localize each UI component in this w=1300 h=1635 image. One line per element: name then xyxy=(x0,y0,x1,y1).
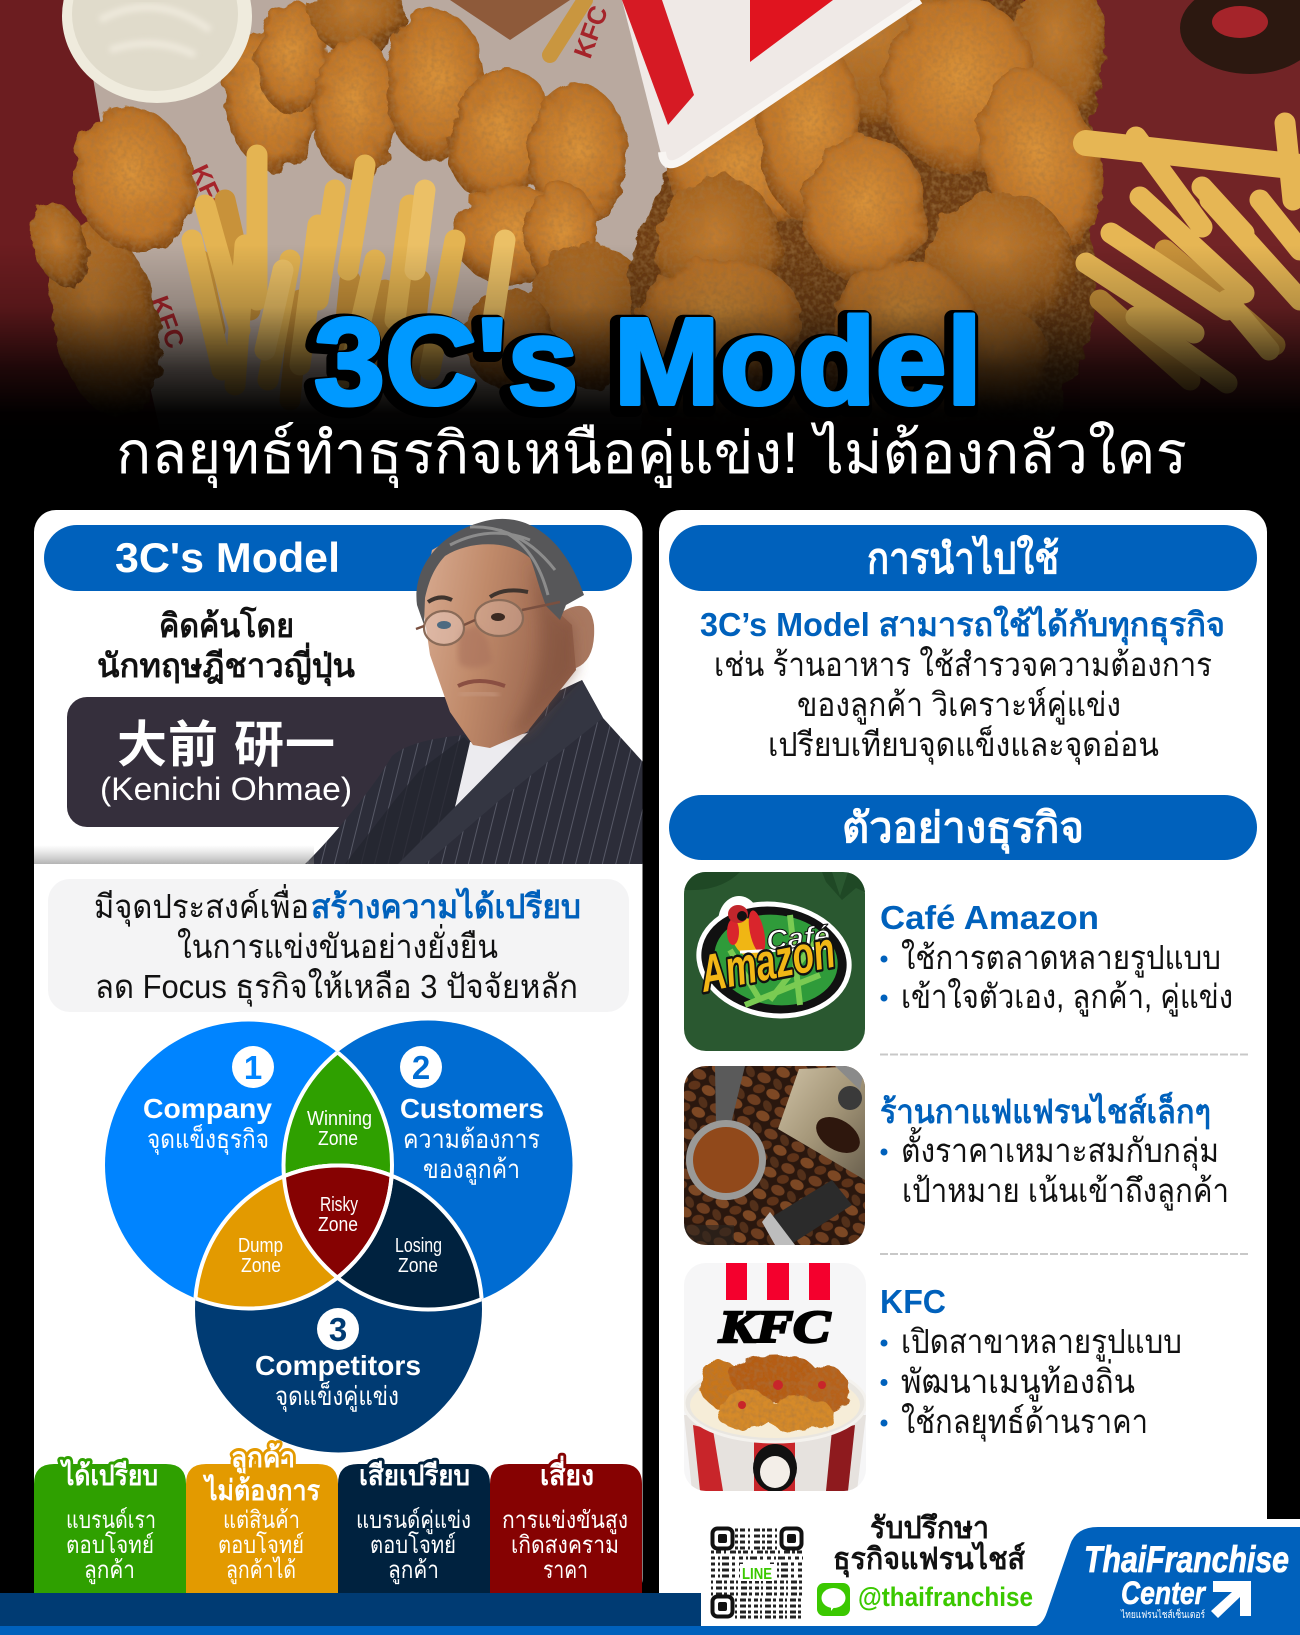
hero food photo xyxy=(0,0,1300,450)
zone: Dump xyxy=(194,1164,390,1306)
application text: เช่น ร้านอาหาร ใช้สำรวจความต้องการ xyxy=(714,646,1212,683)
hero food photo: KFC xyxy=(567,1,614,62)
card: disadvantage: แบรนด์คู่แข่ง xyxy=(356,1506,471,1535)
name box xyxy=(67,697,467,827)
chicken pile xyxy=(630,0,1124,420)
card: risky: การแข่งขันสูง xyxy=(502,1507,628,1535)
card: advantage: แบรนด์เรา xyxy=(66,1506,156,1534)
circle: Customers xyxy=(284,1020,572,1310)
zone: Winning xyxy=(282,1051,390,1176)
card: disadvantage xyxy=(338,1460,490,1594)
label: Customers: Customers xyxy=(400,1093,544,1124)
label: Customers: ของลูกค้า xyxy=(423,1154,520,1185)
badge 2: 2 xyxy=(412,1049,430,1086)
label: Winning Zone: Zone xyxy=(318,1128,358,1150)
logo: ThaiFranchise Center: ไทยแฟรนไชส์เซ็นเตอร์ xyxy=(1120,1607,1206,1621)
card: disadvantage: ตอบโจทย์ xyxy=(370,1531,456,1559)
panel: left top xyxy=(34,510,643,1600)
card: customers do not want: ตอบโจทย์ xyxy=(218,1531,304,1559)
badge 3: 3 xyxy=(329,1311,347,1348)
card: disadvantage: เสียเปรียบ xyxy=(359,1460,470,1491)
title: 3C's Model: 3C's Model xyxy=(314,294,982,431)
purpose box: มีจุดประสงค์เพื่อ xyxy=(94,884,309,927)
name box: (Kenichi Ohmae) xyxy=(100,771,352,807)
inventor caption: นักทฤษฎีชาวญี่ปุ่น xyxy=(97,642,355,687)
icon: LINE xyxy=(817,1583,850,1616)
label: Risky Zone: Zone xyxy=(318,1214,358,1236)
label: Company: จุดแข็งธุรกิจ xyxy=(147,1123,269,1155)
zone: Losing xyxy=(286,1164,484,1308)
zone: Risky xyxy=(286,1164,390,1275)
label: Winning Zone: Winning xyxy=(307,1108,372,1130)
label: Customers: ความต้องการ xyxy=(403,1124,540,1154)
card: customers do not want: ลูกค้า xyxy=(231,1442,295,1475)
card: disadvantage: ลูกค้า xyxy=(388,1557,439,1585)
sauce cup xyxy=(62,0,252,103)
pill: application heading: การนำไปใช้ xyxy=(867,534,1059,582)
LINE handle: @thaifranchise xyxy=(858,1582,1033,1612)
footer bar xyxy=(0,1593,1300,1635)
badge 2 xyxy=(400,1046,442,1088)
card: risky xyxy=(490,1455,642,1594)
text: franchise coffee shop: ร้านกาแฟแฟรนไชส์เล็กๆ xyxy=(880,1091,1211,1130)
text: KFC: พัฒนาเมนูท้องถิ่น xyxy=(901,1359,1135,1402)
text: Cafe Amazon xyxy=(880,899,1233,1017)
badge 1 xyxy=(232,1046,274,1088)
text: Cafe Amazon: เข้าใจตัวเอง, ลูกค้า, คู่แข่ง xyxy=(901,978,1233,1017)
application text: 3C’s Model สามารถใช้ได้กับทุกธุรกิจ xyxy=(700,605,1225,646)
image: KFC logo and rice bucket xyxy=(684,1263,866,1492)
circle: Competitors xyxy=(195,1166,482,1452)
purpose box: สร้างความได้เปรียบ xyxy=(311,887,581,925)
text: KFC: เปิดสาขาหลายรูปแบบ xyxy=(901,1323,1182,1362)
card: customers do not want: ไม่ต้องการ xyxy=(202,1474,320,1506)
pill: 3C's Model heading: 3C's Model xyxy=(115,534,340,581)
image: Cafe Amazon logo: Café xyxy=(765,920,831,956)
shadow above inner panel xyxy=(34,845,314,864)
QR code xyxy=(711,1528,803,1617)
text: Cafe Amazon: ใช้การตลาดหลายรูปแบบ xyxy=(901,939,1221,978)
logo: ThaiFranchise Center: Center xyxy=(1121,1575,1206,1611)
fries left xyxy=(192,155,505,400)
image: Cafe Amazon logo: Amazon xyxy=(694,921,840,1004)
consultation text: ธุรกิจแฟรนไชส์ xyxy=(833,1541,1026,1578)
label: Competitors xyxy=(255,1350,421,1412)
pill: 3C's Model heading xyxy=(44,525,632,591)
label: Losing Zone xyxy=(395,1235,442,1277)
image: coffee beans and grinder xyxy=(684,1066,866,1245)
hero food photo: KFC xyxy=(144,292,191,352)
purpose box xyxy=(48,879,629,1012)
label: Competitors: จุดแข็งคู่แข่ง xyxy=(275,1380,399,1412)
title: 3C's Model: 3C's Model xyxy=(309,297,979,436)
icon: arrow xyxy=(1211,1581,1251,1618)
card: risky: เสี่ยง xyxy=(540,1455,594,1491)
purpose box: ลด Focus ธุรกิจให้เหลือ 3 ปัจจัยหลัก xyxy=(95,968,578,1007)
label: Company: Company xyxy=(143,1093,272,1124)
card: risky: ราคา xyxy=(543,1557,588,1584)
label: Risky Zone xyxy=(318,1194,358,1236)
application text xyxy=(700,605,1225,765)
QR code: LINE xyxy=(742,1566,772,1583)
subtitle: กลยุทธ์ทำธุรกิจเหนือคู่แข่ง! ไม่ต้องกลัวใคร xyxy=(116,420,1187,489)
card: customers do not want: แต่สินค้า xyxy=(223,1507,300,1534)
venn diagram xyxy=(105,1020,572,1452)
badge 1: 1 xyxy=(244,1049,262,1086)
pill: application heading xyxy=(669,525,1257,591)
card: advantage: ได้เปรียบ xyxy=(59,1459,158,1491)
text: KFC xyxy=(880,1283,1182,1442)
label: Dump Zone: Dump xyxy=(238,1235,283,1257)
text: franchise coffee shop xyxy=(880,1091,1229,1211)
label: Losing Zone: Losing xyxy=(395,1235,442,1257)
panel: venn container xyxy=(34,864,642,1600)
portrait: Kenichi Ohmae xyxy=(305,519,643,864)
circle: Company xyxy=(105,1022,392,1308)
label: Dump Zone xyxy=(238,1235,283,1277)
pill: business examples heading: ตัวอย่างธุรกิจ xyxy=(842,804,1084,854)
card: advantage xyxy=(34,1459,186,1594)
text: franchise coffee shop: ตั้งราคาเหมาะสมกับกลุ่ม xyxy=(901,1127,1219,1171)
inventor caption: คิดค้นโดย xyxy=(159,606,294,644)
image: KFC logo and rice bucket: KFC xyxy=(718,1301,832,1352)
logo: ThaiFranchise Center xyxy=(1031,1527,1300,1627)
badge 3 xyxy=(317,1308,359,1350)
bucket xyxy=(622,0,920,168)
card: customers do not want: ลูกค้าได้ xyxy=(226,1556,296,1585)
inventor caption xyxy=(97,606,355,687)
panel: right xyxy=(659,510,1300,1627)
consultation text xyxy=(833,1512,1026,1578)
text: KFC: KFC xyxy=(880,1283,946,1320)
label: Losing Zone: Zone xyxy=(398,1255,438,1277)
image: Cafe Amazon logo xyxy=(684,872,865,1051)
card: customers do not want xyxy=(186,1442,338,1594)
card: advantage: ตอบโจทย์ xyxy=(66,1531,154,1559)
application text: เปรียบเทียบจุดแข็งและจุดอ่อน xyxy=(768,725,1159,765)
text: KFC: ใช้กลยุทธ์ด้านราคา xyxy=(901,1403,1148,1442)
label: Winning Zone xyxy=(307,1108,372,1150)
fries right xyxy=(1086,123,1300,383)
hero food photo: KFC xyxy=(185,160,234,221)
label: Risky Zone: Risky xyxy=(320,1194,358,1216)
application text: ของลูกค้า วิเคราะห์คู่แข่ง xyxy=(797,686,1121,725)
label: Company xyxy=(143,1093,272,1155)
purpose box: ในการแข่งขันอย่างยั่งยืน xyxy=(177,924,498,965)
name box: 大前 研一 xyxy=(117,717,335,773)
small fry and box xyxy=(450,0,570,40)
pill: business examples heading xyxy=(669,795,1257,860)
card: advantage: ลูกค้า xyxy=(84,1557,135,1585)
label: Dump Zone: Zone xyxy=(241,1255,281,1277)
consultation text: รับปรึกษา xyxy=(870,1512,989,1545)
text: franchise coffee shop: เป้าหมาย เน้นเข้าถึงลูกค้า xyxy=(902,1172,1229,1211)
label: Competitors: Competitors xyxy=(255,1350,421,1381)
text: Cafe Amazon: Café Amazon xyxy=(880,899,1099,936)
card: risky: เกิดสงคราม xyxy=(511,1532,619,1559)
label: Customers xyxy=(400,1093,544,1185)
